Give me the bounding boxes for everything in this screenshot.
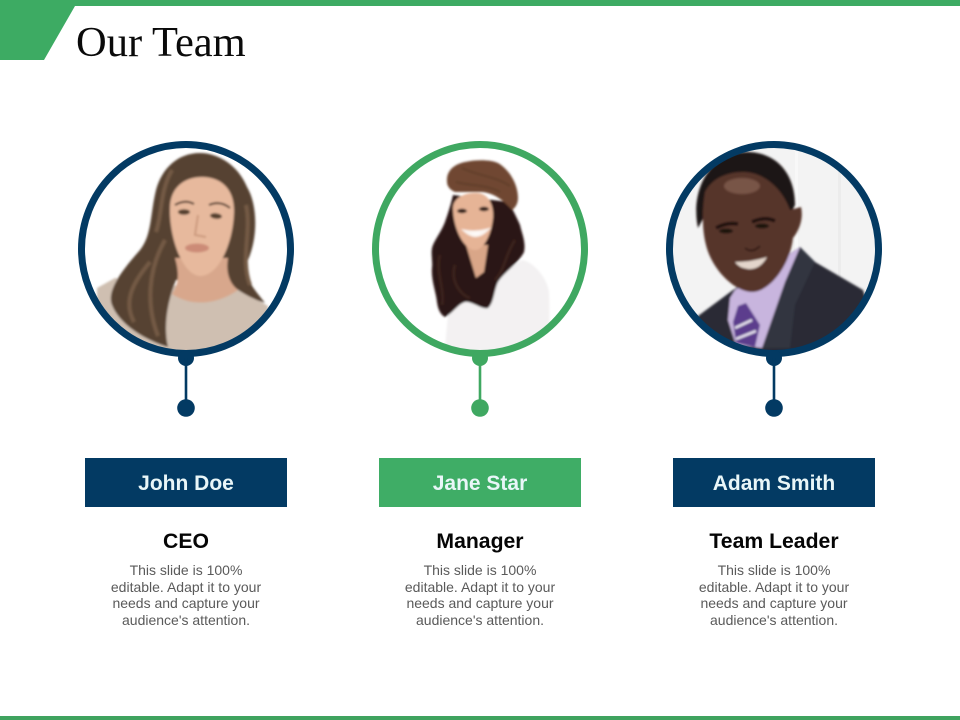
portrait: Jane Star: [432, 160, 549, 360]
description: Team Leader: needs and capture your: [700, 595, 848, 611]
portrait graphics: [78, 141, 882, 417]
description: CEO: [111, 562, 261, 628]
portrait: John Doe: [97, 153, 268, 360]
name bar: Jane Star: Jane Star: [433, 472, 527, 495]
role: CEO: CEO: [163, 530, 209, 553]
description: Team Leader: [699, 562, 849, 628]
role: Team Leader: Team Leader: [709, 530, 839, 553]
description: CEO: editable. Adapt it to your: [111, 579, 261, 595]
connector: Adam Smith: [765, 350, 783, 417]
description: Team Leader: audience's attention.: [710, 612, 838, 628]
connector: John Doe: [177, 350, 195, 417]
ring: John Doe: [82, 144, 290, 354]
name bar: Jane Star: [379, 458, 581, 507]
ring: Adam Smith: [670, 144, 878, 354]
description: CEO: audience's attention.: [122, 612, 250, 628]
description: Manager: [405, 562, 555, 628]
ring: Jane Star: [376, 144, 584, 354]
description: CEO: This slide is 100%: [130, 562, 242, 578]
description: Manager: editable. Adapt it to your: [405, 579, 555, 595]
description: Team Leader: This slide is 100%: [718, 562, 830, 578]
header accent: green bar and slanted tab: [0, 0, 960, 60]
name bar: John Doe: [85, 458, 287, 507]
name bar: Adam Smith: [673, 458, 875, 507]
description: Manager: needs and capture your: [406, 595, 554, 611]
description: Team Leader: editable. Adapt it to your: [699, 579, 849, 595]
description: Manager: audience's attention.: [416, 612, 544, 628]
name bar: Adam Smith: Adam Smith: [713, 472, 835, 495]
description: CEO: needs and capture your: [112, 595, 260, 611]
name bar: John Doe: John Doe: [138, 472, 234, 495]
description: Manager: This slide is 100%: [424, 562, 536, 578]
role: Manager: Manager: [436, 530, 524, 553]
connector: Jane Star: [471, 350, 489, 417]
portrait: Adam Smith: [673, 148, 875, 350]
footer bar: [0, 716, 960, 720]
title: Our Team: [76, 19, 246, 66]
